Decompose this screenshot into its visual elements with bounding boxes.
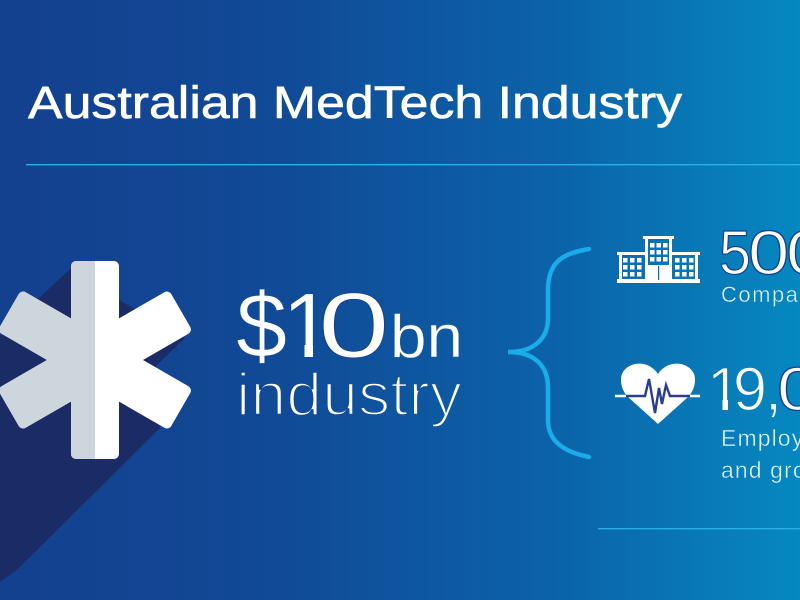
headline figure: $10bn: [237, 289, 459, 364]
long shadow: [0, 268, 185, 582]
icon: medical star with long shadow: [0, 261, 193, 582]
number: 19,000: 1: [707, 355, 741, 423]
stat: companies: [617, 218, 800, 307]
number: 500: [719, 218, 800, 288]
label: employees and growing: [721, 425, 800, 483]
icon: heart with heartbeat: [615, 364, 700, 424]
number: 19,000: ,: [765, 355, 782, 423]
icon: hospital building: [617, 236, 700, 283]
number: 19,000: [713, 366, 800, 418]
headline figure: $10bn: 1: [282, 275, 333, 377]
headline figure: $10bn: $: [236, 275, 287, 377]
label: industry: industry: [236, 361, 462, 428]
number: 500: 5: [719, 218, 751, 287]
headline figure: $10bn: 0: [318, 274, 390, 377]
number: 19,000: 9: [733, 355, 767, 423]
number: 500: 0: [748, 218, 789, 288]
curly brace: [508, 249, 589, 457]
star grey half: [0, 261, 95, 459]
title: Australian MedTech Industry: [28, 77, 683, 128]
stat: employees: [615, 355, 800, 483]
star white half: [0, 261, 193, 459]
headline figure: $10bn: bn: [390, 303, 463, 370]
